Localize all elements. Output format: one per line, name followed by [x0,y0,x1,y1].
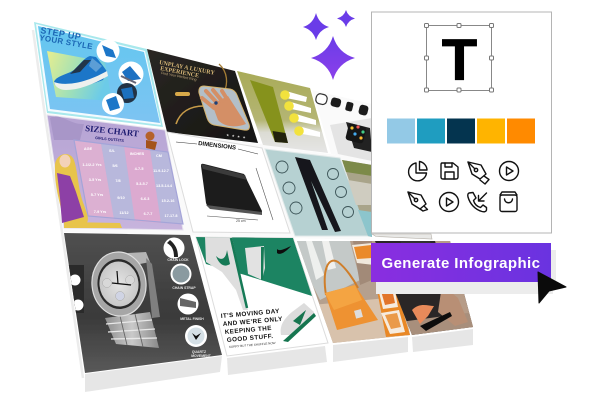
button: generate infographic: Generate Infographic [382,255,540,272]
tile grid [33,22,475,392]
hand photo [199,86,249,130]
tile: moving day sneakers [196,237,328,356]
watch shapes [315,93,369,116]
feature circles: CHAIN STRAP [172,286,196,290]
button: generate infographic [371,243,551,282]
tile: luxury experience: ★ ★ ★ ★ [226,133,247,140]
tile: moving day sneakers: SORRY BUT THE SHUFFLE NOW [229,341,276,349]
headline: IT'S MOVING DAY [221,308,280,320]
size table: 11.9-12.7 [153,169,169,173]
feature circles [164,238,212,358]
character: monkey [146,132,157,150]
feature circles: METAL FINISH [180,317,204,321]
tile: luxury experience: Find Your Perfect Ring [161,71,197,82]
side tabs [68,265,84,313]
title: STEP UP [40,25,82,42]
button shadow [376,250,556,294]
character: princess [55,154,122,228]
tube [250,80,288,143]
tile: size chart: GIRLS OUTFITS [95,136,125,143]
tile: smart watch [312,90,372,161]
gold button [175,92,190,96]
steel watch [89,249,160,348]
size table: 9/10 [117,196,125,200]
toaster [201,164,262,215]
icon: large sparkle [311,36,355,80]
size table: 17-17.8 [165,214,177,218]
strip below panel [372,234,432,239]
heading: EXPERIENCE [160,66,199,79]
benefit badges [280,90,320,137]
size table: 7-9 Yrs [94,210,106,214]
icon: small sparkle [337,10,355,27]
measurement lines [207,168,273,220]
swoosh logo [277,246,291,254]
tile: dimensions [167,132,290,233]
tile: garden [342,160,372,237]
headline: AND WE'RE ONLY [223,316,283,328]
tile: luxury experience [147,49,258,143]
left edge shadow [33,30,83,378]
icon: cursor arrow [538,272,566,303]
icon set [408,162,518,212]
tile: size chart [47,115,183,230]
headline [221,308,283,344]
sneaker [281,303,316,342]
handbag [325,261,378,330]
feature circles: MOVEMENT [191,354,212,358]
tile: orange bag [297,241,420,345]
trousers [295,157,341,232]
feature icons [276,161,354,218]
title [39,25,94,51]
headline: KEEPING THE [225,325,272,336]
icon: play [500,162,518,180]
tile: olive tube [237,71,328,153]
icon: pen tool [468,162,489,184]
size table: INCHES [130,152,145,156]
tile: step up your style [34,22,163,127]
tile drop shadows [85,329,473,392]
tile: dark watch [64,233,222,373]
text selection box [424,24,494,93]
size table: 7/8 [115,179,121,183]
feature circles: CHAIN LOCK [167,258,189,262]
detail circles [96,40,144,115]
size table [74,140,183,224]
size table: 1-1/2-2 Yrs [82,163,102,167]
heading: UNPLAY A LUXURY [159,60,216,77]
icon: save [441,163,458,179]
icon: blue shoe [54,56,108,90]
text selection box: T [442,28,477,93]
size table: 11/12 [119,211,129,215]
grid backing [46,113,370,240]
colour palette [387,118,535,144]
tile: dimensions: 25 cm [236,219,246,223]
gold arcs [176,106,204,124]
title: YOUR STYLE [39,33,94,51]
icon: play 2 [440,192,458,212]
size table: 5-7 Yrs [91,193,103,197]
size table: 6-6.3 [141,197,149,201]
main watch [345,122,372,152]
icon: pen tool 2 [408,192,428,211]
size table: 6.7-7 [144,212,152,216]
panel: design toolkit [372,12,552,233]
sparkles [303,10,355,80]
title: SIZE CHART [85,123,139,139]
size table: 13.5-14.4 [156,184,173,188]
tile: model in black [375,241,475,340]
size table: 5/6 [112,164,118,168]
icon: incoming call [468,192,486,212]
orange product cards [352,243,410,337]
feature circles: QUARTZ [192,350,206,354]
icon: shopping bag [500,192,517,212]
size table: AGE [84,147,93,151]
tile: trousers [265,149,370,236]
size table: S/L [109,149,116,153]
icon: medium sparkle [303,13,329,40]
size table: 4-7-5 [135,167,143,171]
size table: 5.3-5.7 [136,182,148,186]
sneakers on green [205,237,248,310]
headline: GOOD STUFF. [227,333,274,344]
size table: CM [156,154,162,158]
icon: pie chart [409,162,427,181]
heading: DIMENSIONS [198,141,236,152]
size table: 3-5 Yrs [89,178,101,182]
size table: 15.2-16 [162,199,174,203]
